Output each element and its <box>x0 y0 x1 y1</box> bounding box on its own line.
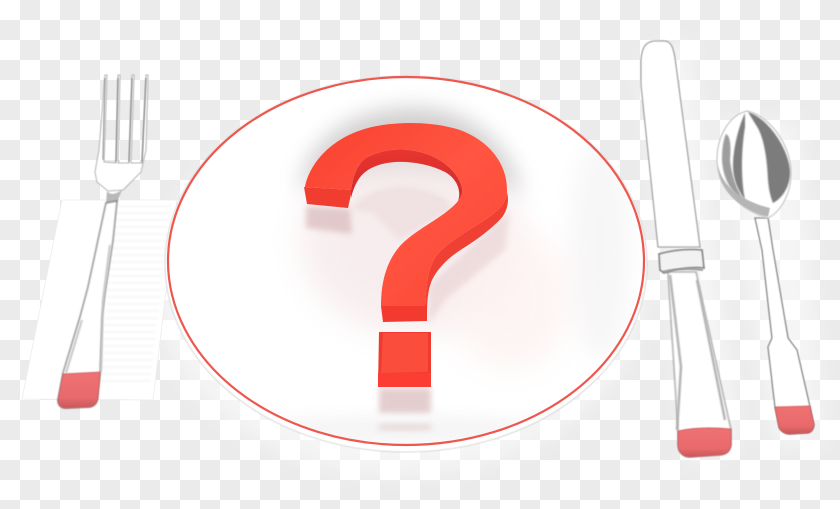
knife handle highlights <box>670 275 725 430</box>
spoon handle <box>755 218 814 434</box>
knife <box>641 41 731 457</box>
napkin fold texture <box>100 204 172 385</box>
plate <box>165 76 647 452</box>
fork head <box>95 75 148 191</box>
plate rim <box>165 76 647 452</box>
spoon right reflection <box>748 112 790 203</box>
question mark bottom wall <box>381 305 427 322</box>
cutlery and plate soft shadows <box>155 40 825 475</box>
question mark hook end wall <box>304 187 352 208</box>
question mark reflection <box>306 188 510 430</box>
spoon bowl <box>717 111 791 218</box>
spoon left reflection <box>722 134 744 200</box>
question mark outer wall <box>423 192 508 321</box>
question mark <box>304 123 510 430</box>
spoon middle reflection <box>733 113 745 200</box>
question mark front face <box>305 123 507 306</box>
knife tip <box>678 428 731 457</box>
napkin <box>22 200 177 400</box>
fork tine shadows <box>103 78 146 162</box>
plate red ring <box>168 77 644 445</box>
fork neck shading <box>106 190 122 204</box>
fork handle <box>58 201 117 408</box>
plate inner shading <box>294 98 613 438</box>
knife bolster <box>659 250 704 273</box>
question mark dot <box>378 332 431 387</box>
fork handle shade <box>66 245 110 373</box>
knife blade <box>641 41 700 247</box>
spoon <box>717 111 814 434</box>
question mark inner wall <box>351 150 462 201</box>
fork tip <box>58 372 100 408</box>
plate surface <box>168 77 644 445</box>
spoon tip <box>775 406 814 434</box>
knife bolster base <box>662 269 703 272</box>
fork <box>58 75 148 408</box>
knife handle <box>668 272 731 457</box>
spoon lower reflection <box>718 165 770 217</box>
